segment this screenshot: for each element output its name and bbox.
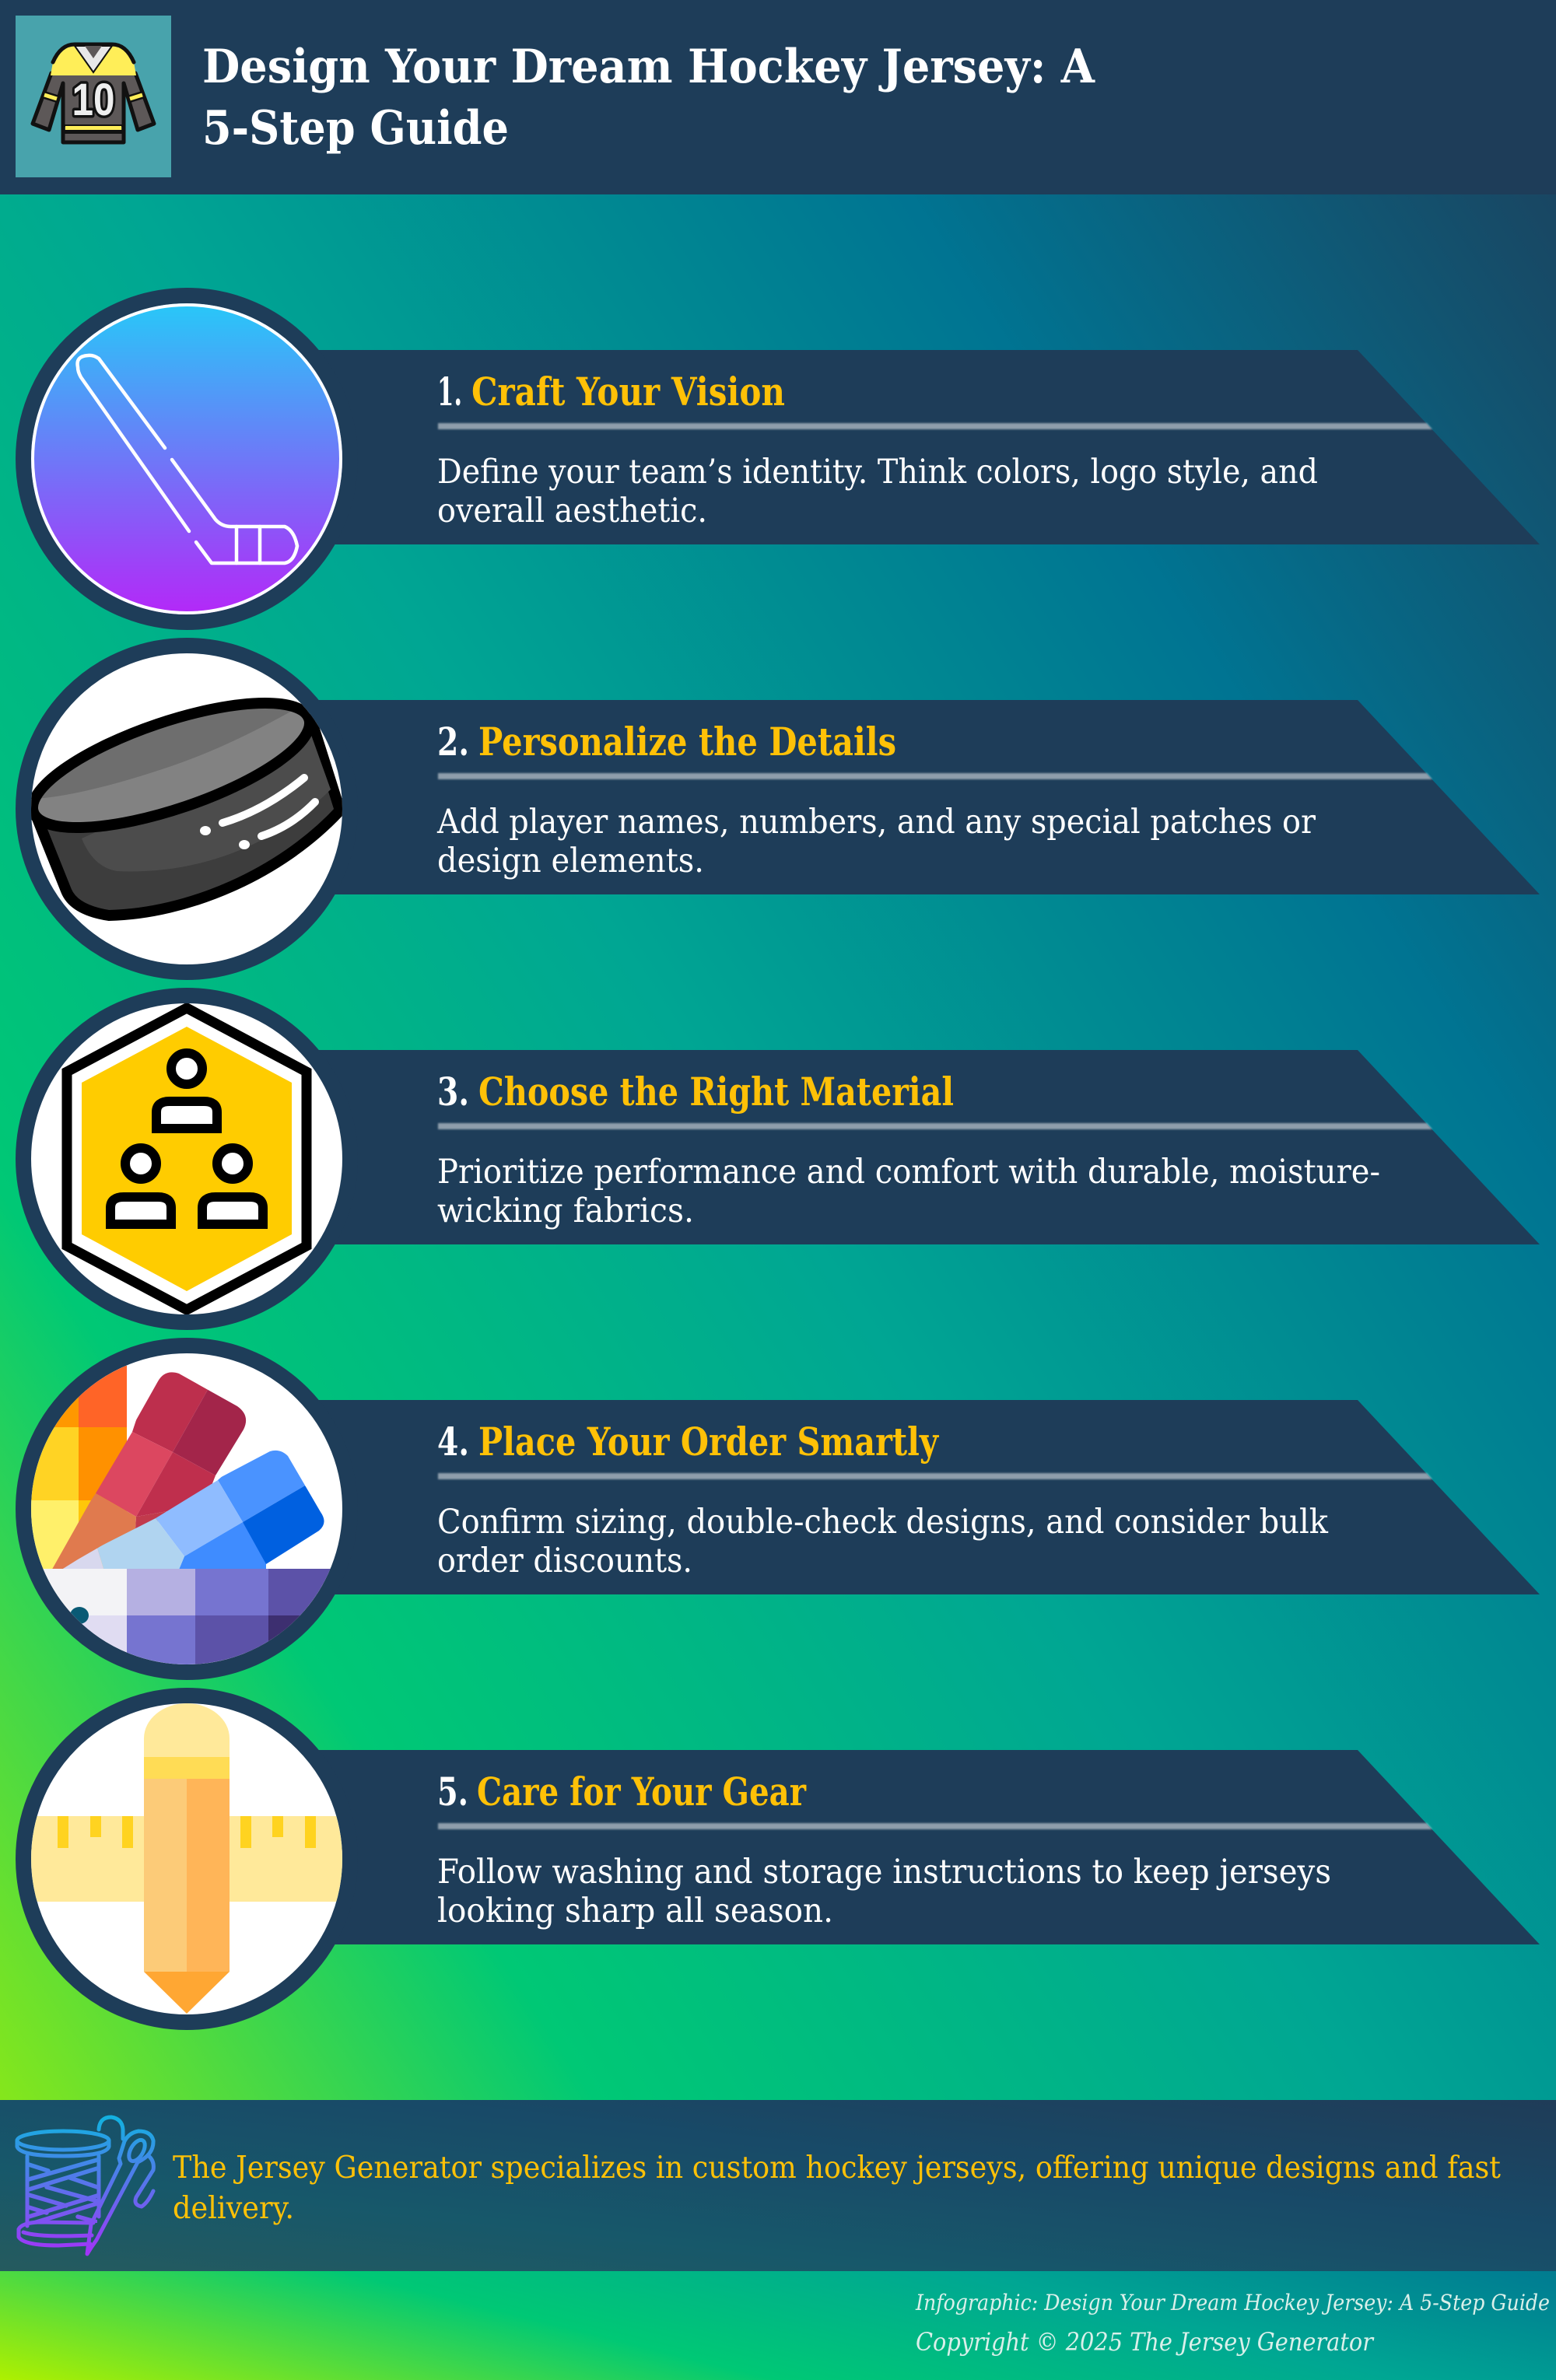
footer callout band [0,2100,1556,2271]
header bar [0,0,1556,194]
icon: hockey puck [19,677,340,915]
description: step 4 [437,1503,1329,1580]
description: step 4: Confirm sizing, double-check designs, and consider bulk [437,1503,1329,1542]
panel: step 1 [23,296,1540,622]
description: step 3: wicking fabrics. [437,1192,694,1230]
banner shape [311,350,1540,544]
description: step 3: Prioritize performance and comfort with durable, moisture- [437,1153,1380,1192]
description: step 3 [437,1153,1380,1230]
copyright line: Copyright © 2025 The Jersey Generator [916,2327,1375,2357]
description: step 5 [437,1853,1331,1930]
icon: colour swatch fan [31,1361,342,1670]
icon: team hexagon badge [67,1008,307,1310]
callout text [173,2151,1501,2226]
panel: step 3 [23,996,1540,1322]
title: 5-Step Guide [202,101,509,156]
description: step 2: Add player names, numbers, and any special patches or [436,803,1316,842]
description: step 4: order discounts. [437,1542,692,1580]
icon: hockey stick [31,303,342,614]
heading: step 2: Personalize the Details [478,719,896,765]
icon: hockey jersey [16,16,171,177]
description: step 2: design elements. [437,842,704,880]
icon: pencil and ruler [31,1703,342,2014]
description: step 5: Follow washing and storage instructions to keep jerseys [437,1853,1331,1892]
heading: step 5: Care for Your Gear [477,1769,807,1815]
heading: step 4: Place Your Order Smartly [478,1419,940,1465]
heading: step 3: 3. [437,1069,469,1115]
banner shape [311,700,1540,894]
heading: step 3: Choose the Right Material [478,1069,954,1115]
description: step 1: Define your team’s identity. Think colors, logo style, and [437,453,1318,492]
banner shape [311,1400,1540,1594]
description: step 1: overall aesthetic. [437,492,707,530]
heading: step 1: 1. [437,369,462,415]
description: step 1 [437,453,1318,530]
title: Design Your Dream Hockey Jersey: A [202,40,1095,94]
description: step 2 [436,803,1316,880]
description: step 5: looking sharp all season. [437,1892,833,1930]
icon: hockey jersey: 10 [72,75,115,125]
panel: step 2 [19,646,1540,972]
panel: step 5 [23,1696,1540,2022]
callout text: delivery. [173,2191,294,2226]
title [202,40,1095,156]
panel: step 4 [23,1346,1540,1672]
heading: step 5: 5. [437,1769,468,1815]
callout text: The Jersey Generator specializes in custom hockey jerseys, offering unique designs and fast [173,2151,1501,2186]
heading: step 2: 2. [437,719,469,765]
banner shape [311,1750,1540,1944]
icon: thread spool and needle [17,2117,153,2254]
heading: step 4: 4. [437,1419,469,1465]
banner shape [311,1050,1540,1244]
footer strip gradient [0,2271,1556,2380]
heading: step 1: Craft Your Vision [471,369,785,415]
